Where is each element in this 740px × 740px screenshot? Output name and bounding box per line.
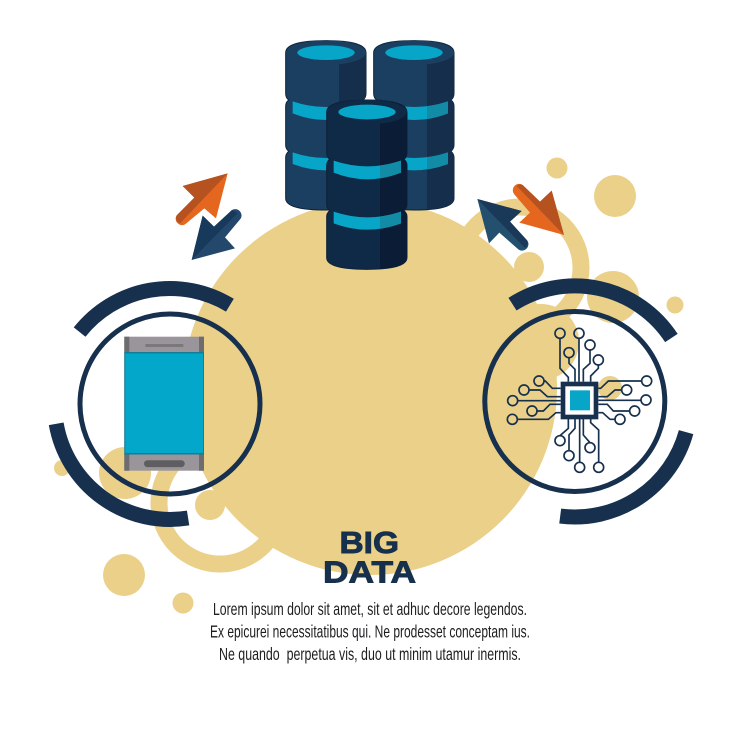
title: BIG DATA: DATA <box>323 554 416 590</box>
yellow background blob <box>54 158 684 614</box>
right ring <box>485 312 665 492</box>
right outer arcs <box>512 286 686 517</box>
body text: Ne quando perpetua vis, duo ut minim utamur inermis. <box>219 644 521 664</box>
smartphone badge <box>56 288 260 519</box>
arrows: left pair <box>176 173 242 260</box>
body text: Ex epicurei necessitatibus qui. Ne prodesset conceptam ius. <box>210 622 530 642</box>
infographic <box>48 40 694 664</box>
icon: circuit chip <box>507 328 652 472</box>
database stack icon <box>286 40 455 270</box>
title: BIG DATA <box>323 525 416 590</box>
body text <box>210 599 530 664</box>
icon: smartphone <box>124 337 204 471</box>
body text: Lorem ipsum dolor sit amet, sit et adhuc decore legendos. <box>213 599 527 619</box>
arrows: right pair <box>477 184 564 251</box>
circuit badge <box>485 286 686 517</box>
left ring <box>80 314 260 494</box>
left outer arcs <box>56 288 230 519</box>
title: BIG DATA: BIG <box>340 525 399 560</box>
